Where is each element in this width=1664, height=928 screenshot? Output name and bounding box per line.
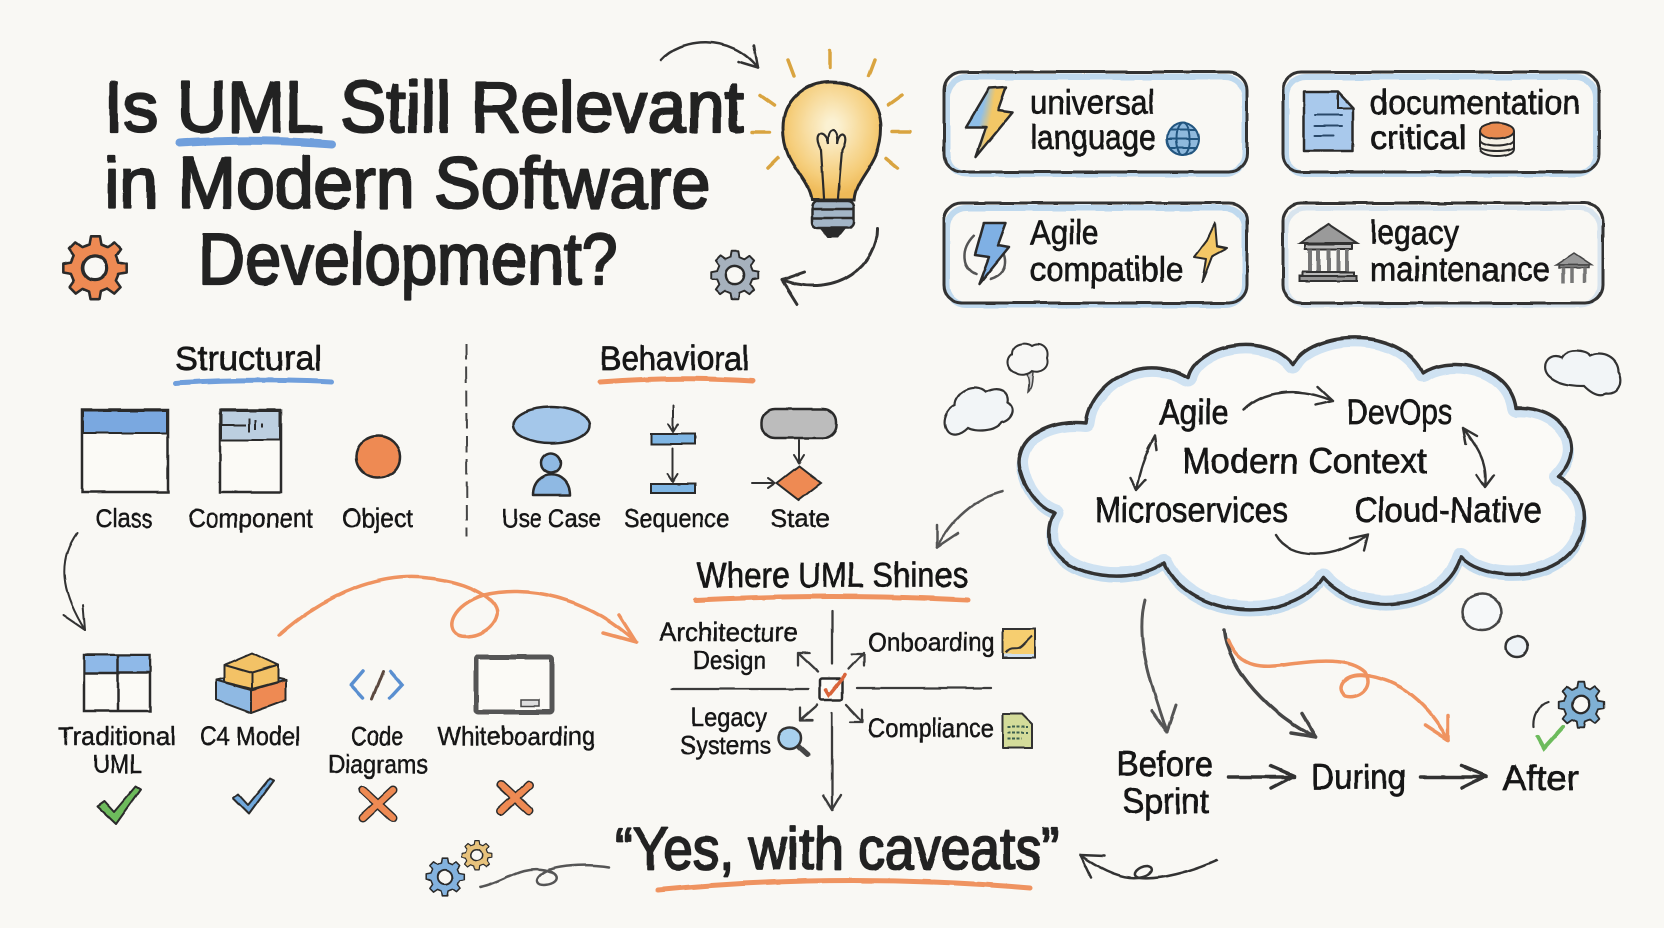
panel: universal language: universal	[1030, 84, 1155, 122]
icon: cross	[363, 790, 393, 818]
panel: legacy maintenance: maintenance	[1370, 251, 1550, 289]
arrow: During to After	[1420, 766, 1486, 788]
label: Sequence: Sequence	[624, 503, 729, 533]
conclusion quote: “Yes, with caveats”	[615, 816, 1059, 882]
icon: orange gear	[63, 236, 127, 300]
heading: Behavioral: Behavioral	[600, 340, 749, 378]
panel: documentation critical: documentation	[1370, 84, 1580, 122]
icon: Sequence	[651, 405, 695, 493]
icon: bank	[1300, 224, 1357, 281]
label: Class: Class	[96, 503, 153, 533]
label: Before Sprint: Before	[1117, 745, 1213, 784]
panel: Modern Context cloud: Modern Context	[1182, 442, 1427, 481]
label: Compliance: Compliance	[868, 713, 994, 743]
icon: yellow bolt	[1194, 223, 1227, 282]
label: Legacy Systems	[680, 702, 771, 760]
arrow: cloud to Where UML Shines	[937, 491, 1003, 547]
icon: small gears	[426, 840, 492, 896]
icon: check blue	[233, 778, 274, 814]
panel: Agile compatible	[944, 203, 1247, 305]
icon: Object	[356, 436, 400, 478]
icon: small cloud right	[1545, 351, 1620, 395]
panel: Agile compatible: compatible	[1030, 251, 1183, 289]
icon: gear with check	[1534, 682, 1604, 748]
panel: legacy maintenance	[1283, 203, 1603, 305]
label: Architecture Design: Architecture	[659, 617, 798, 647]
heading: Where UML Shines: Where UML Shines	[697, 556, 968, 595]
icon: C4 Model	[216, 653, 286, 713]
label: Traditional UML: Traditional	[58, 721, 176, 751]
icon: small cloud top	[1007, 344, 1048, 392]
panel: Modern Context cloud: Agile	[1159, 393, 1229, 432]
icon: small cloud left	[945, 388, 1013, 435]
label: C4 Model: C4 Model	[200, 721, 300, 751]
icon: magnifier	[779, 727, 808, 755]
icon: Component	[220, 410, 281, 492]
arrows: cloud cycle	[1130, 387, 1494, 554]
label: Code Diagrams	[328, 721, 428, 779]
arrow: into quote	[1080, 855, 1217, 878]
panel: Modern Context cloud: Cloud-Native	[1354, 491, 1542, 530]
title: Development?	[198, 220, 618, 300]
arrow: orange loop to Where UML Shines	[279, 577, 636, 642]
panel: documentation critical: critical	[1370, 119, 1466, 157]
thought bubble	[1462, 594, 1528, 657]
title: Is UML Still Relevant	[104, 68, 744, 148]
label: Component: Component	[188, 503, 314, 533]
icon: Use Case	[513, 407, 589, 495]
label: Code Diagrams: Diagrams	[328, 749, 428, 779]
icon: code brackets	[351, 671, 402, 699]
label: Onboarding: Onboarding	[868, 627, 995, 657]
icon: database	[1480, 123, 1514, 156]
label: Architecture Design: Design	[693, 645, 766, 675]
title: in Modern Software	[104, 144, 710, 224]
arrow: orange loop to After	[1228, 640, 1448, 740]
icon: whiteboard	[476, 657, 552, 712]
panel: Modern Context cloud	[1019, 338, 1584, 614]
icon: compliance sheet	[1003, 714, 1032, 748]
arrow: into bulb	[661, 42, 758, 68]
arrow: Class to approaches	[63, 533, 85, 630]
icon: small bank	[1556, 253, 1592, 283]
icon: gray gear	[711, 251, 759, 299]
label: After: After	[1502, 759, 1579, 798]
icon: chart	[1003, 629, 1035, 658]
diagram: where UML shines cross	[671, 611, 991, 810]
icon: lightning bolt	[966, 87, 1013, 157]
icon: check green	[97, 786, 141, 824]
label: Whiteboarding: Whiteboarding	[438, 721, 595, 751]
icon: cross	[501, 785, 529, 811]
icon: checkbox with pencil	[820, 675, 845, 700]
icon: Class	[82, 410, 168, 492]
panel: Modern Context cloud: Microservices	[1095, 491, 1288, 530]
icon: globe	[1167, 123, 1199, 155]
label: Use Case: Use Case	[502, 503, 601, 533]
label: Before Sprint: Sprint	[1122, 782, 1209, 821]
panel: documentation critical	[1283, 72, 1599, 174]
arrow: Before to During	[1228, 766, 1294, 788]
label: Traditional UML: UML	[93, 749, 142, 779]
panel: universal language	[944, 72, 1247, 174]
label: Architecture Design	[659, 617, 798, 675]
icon: light bulb	[752, 50, 910, 238]
title	[104, 68, 744, 300]
label: During: During	[1311, 758, 1406, 797]
arrow: bulb to gear	[782, 228, 877, 304]
panel: universal language: language	[1030, 119, 1156, 157]
panel: legacy maintenance: legacy	[1370, 214, 1459, 252]
label: Object: Object	[342, 503, 414, 533]
label: Before Sprint	[1117, 745, 1213, 821]
label: Legacy Systems: Legacy	[691, 702, 767, 732]
squiggle arrow	[480, 865, 608, 887]
label: Traditional UML	[58, 721, 176, 779]
panel: Modern Context cloud: DevOps	[1347, 393, 1452, 432]
arrow: cloud to During	[1224, 630, 1316, 737]
label: State: State	[770, 503, 830, 533]
icon: State	[752, 409, 836, 500]
label: Code Diagrams: Code	[351, 721, 403, 751]
panel: Agile compatible: Agile	[1030, 214, 1099, 252]
icon: document	[1304, 92, 1353, 151]
icon: blue bolt with cycle arrows	[964, 223, 1009, 284]
arrow: cloud to Before Sprint	[1142, 600, 1176, 732]
icon: Traditional UML	[84, 655, 150, 711]
label: Legacy Systems: Systems	[680, 730, 771, 760]
heading: Structural: Structural	[175, 340, 322, 378]
